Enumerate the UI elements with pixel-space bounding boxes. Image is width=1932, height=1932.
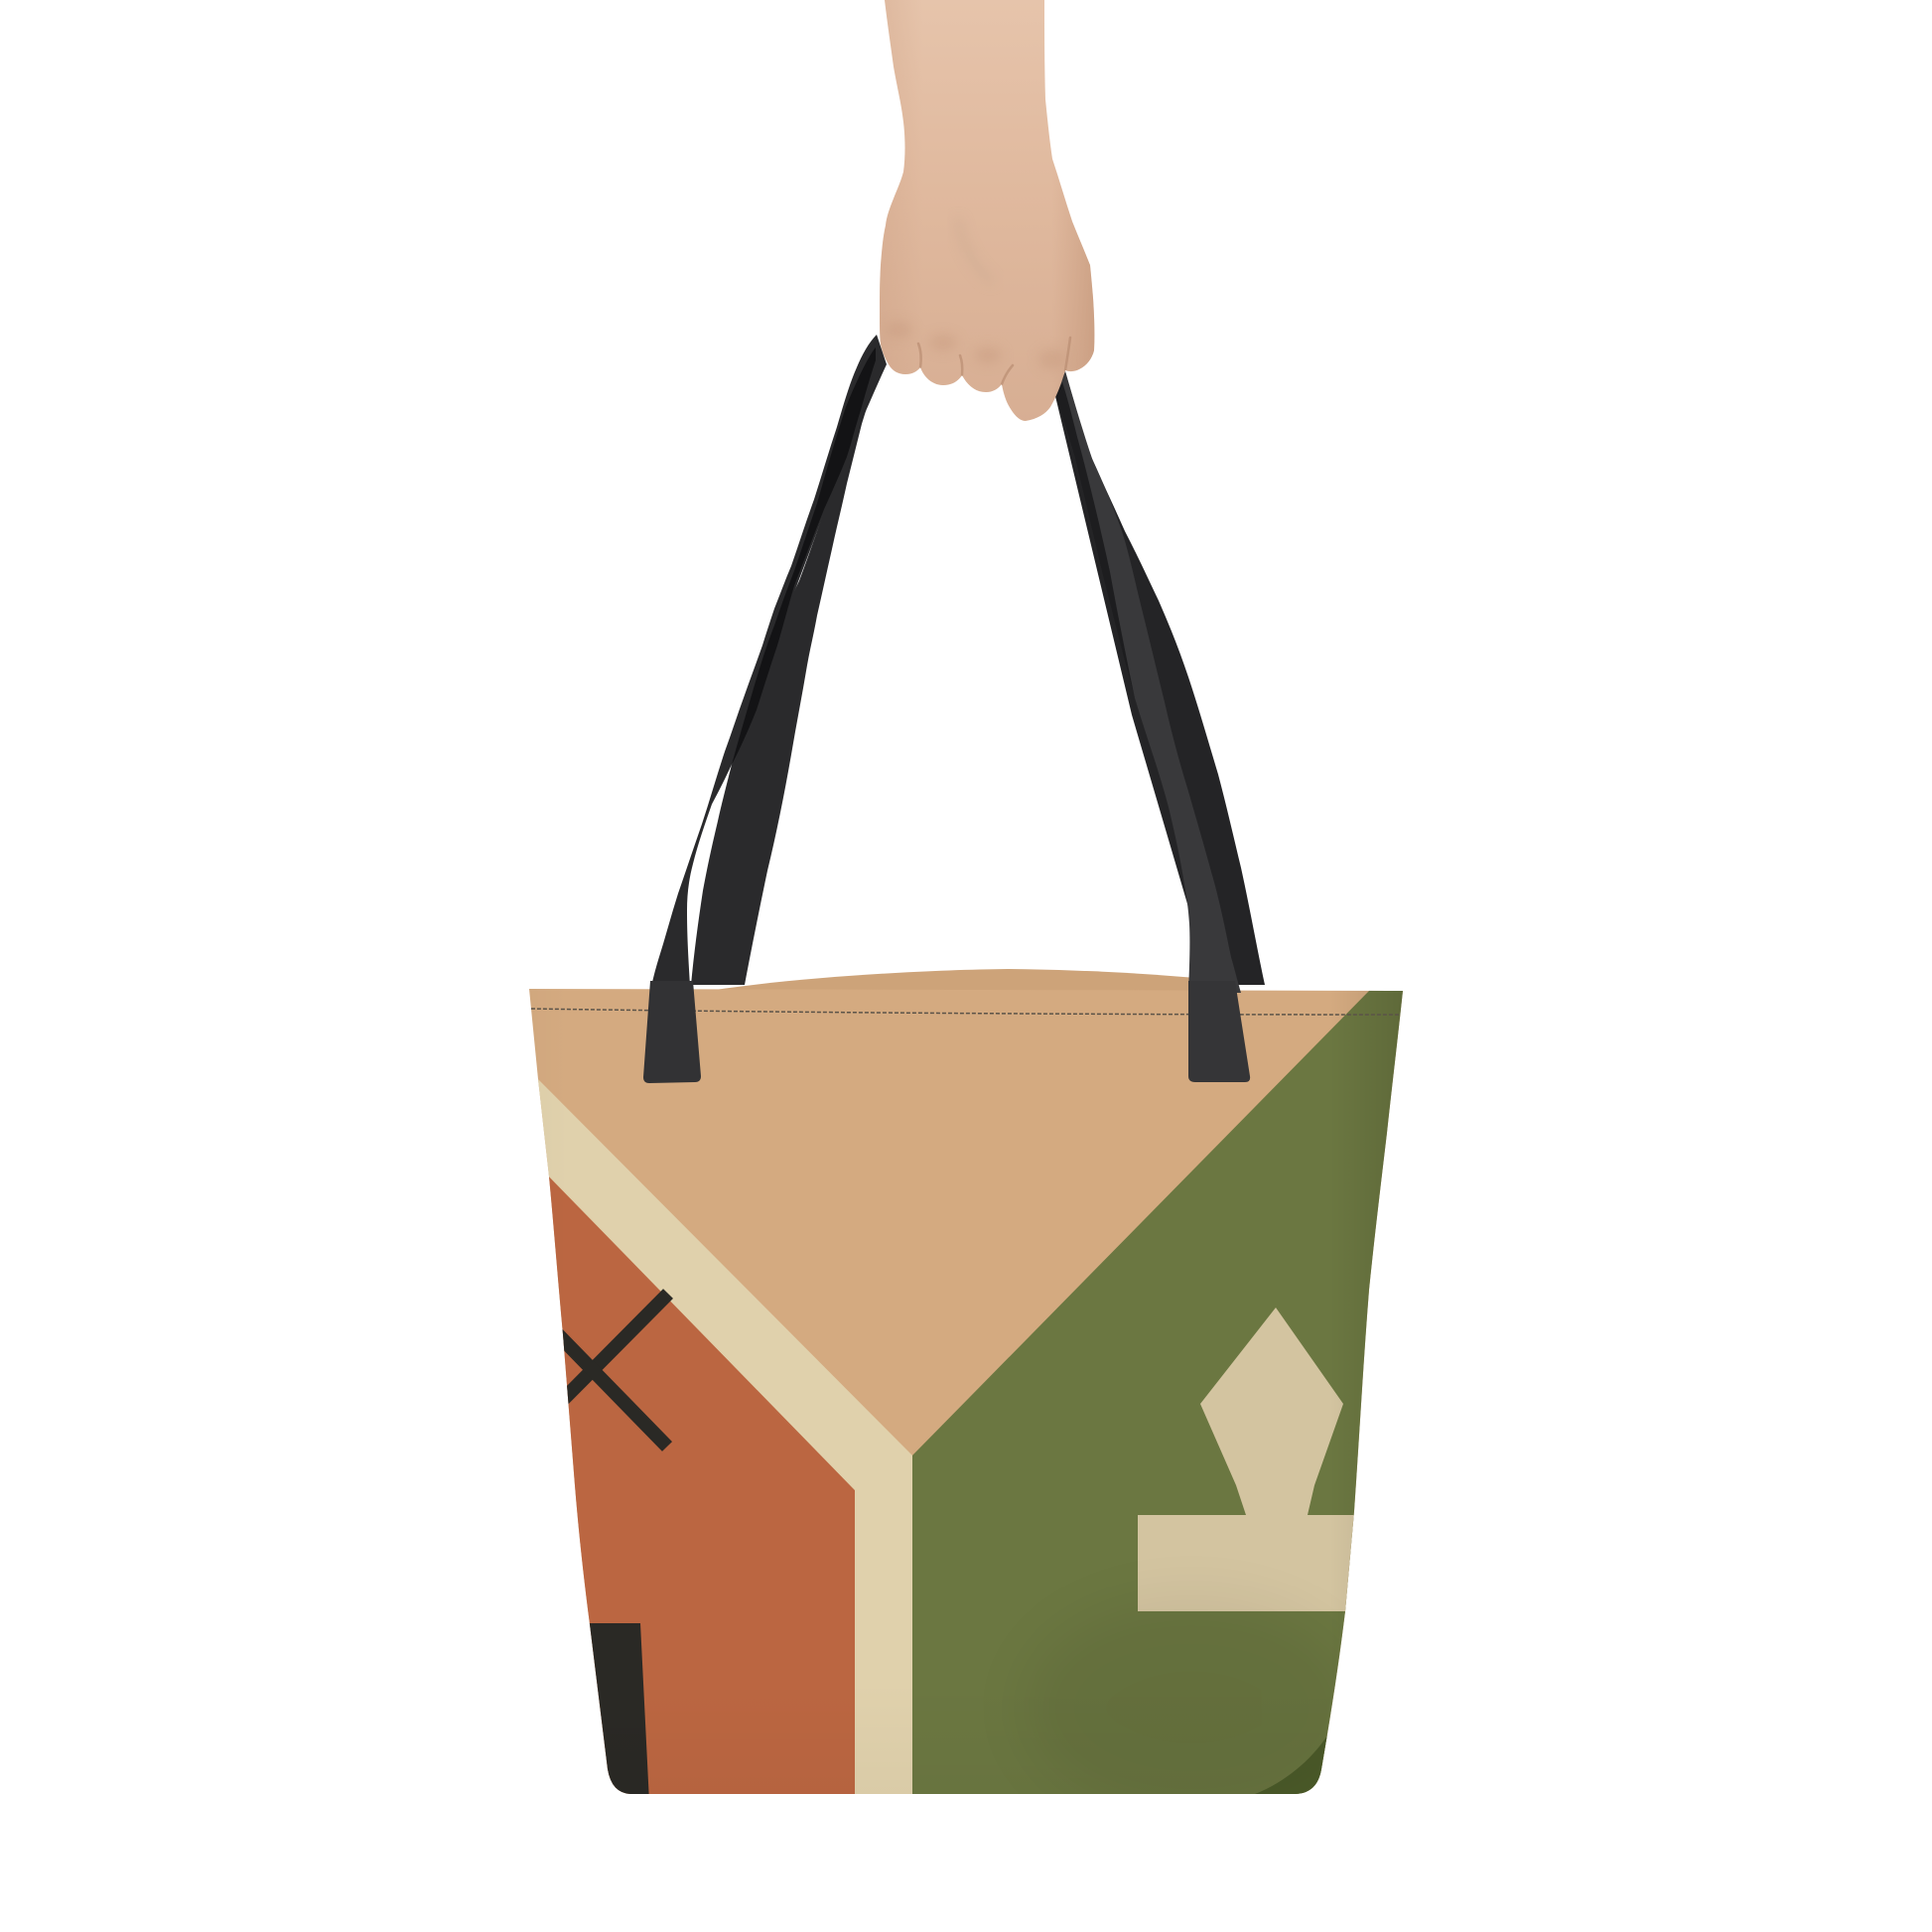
soft shadow lower right (1164, 1609, 1219, 1611)
dark edge of right front strap (1055, 382, 1135, 698)
dark green corner fold (1255, 1735, 1327, 1794)
black X on orange (551, 1294, 668, 1447)
tan panel (516, 978, 1420, 1802)
back handle straps (691, 364, 1265, 985)
dark inner fold of left strap (732, 347, 876, 764)
orange panel (536, 1164, 855, 1802)
right strap pad (1188, 981, 1250, 1082)
finger creases (918, 338, 1070, 384)
back strap right (1055, 371, 1265, 985)
black rectangle on orange (590, 1623, 649, 1794)
cream pawn shape on green (1138, 1308, 1354, 1611)
back strap left (691, 364, 887, 985)
hand and wrist (874, 0, 1102, 427)
stitching line (531, 1009, 1400, 1015)
hand fill (874, 0, 1102, 427)
left thin front strap (650, 335, 887, 993)
green panel (912, 981, 1420, 1802)
bag back panel inside opening (695, 969, 1206, 995)
vein shading (958, 218, 993, 283)
front handle straps (643, 335, 1250, 1083)
product photo: hand holding tote bag (529, 0, 1403, 1794)
knuckle shading (896, 326, 1059, 365)
tote bag body (516, 978, 1420, 1817)
right front strap (1055, 371, 1241, 993)
fabric shading (1355, 991, 1403, 1225)
cream Y band (531, 1072, 912, 1802)
left strap pad (643, 981, 701, 1083)
